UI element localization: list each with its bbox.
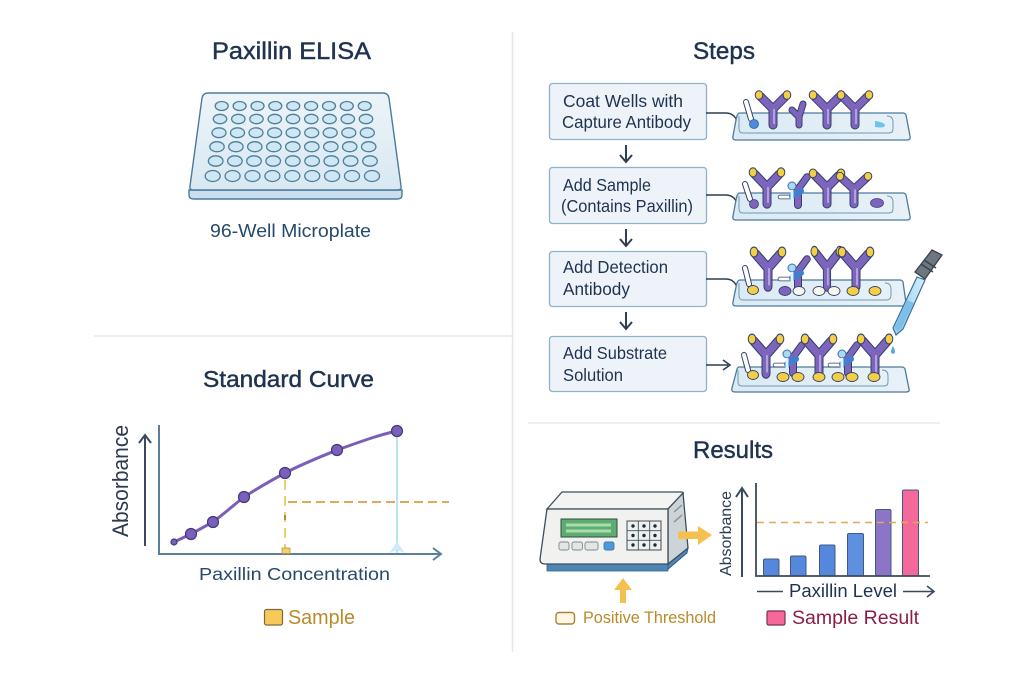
arrow: reader to chart: [678, 526, 712, 545]
panel: step 3 box: [550, 252, 706, 306]
y axis title: Absorbance: [718, 491, 735, 576]
illustration: step 4 substrate well: [706, 334, 909, 392]
bars: [764, 490, 918, 576]
sample dashed guide lines: [285, 480, 449, 548]
illustration: step 2 sample well: [706, 168, 910, 220]
data points: [171, 426, 402, 545]
screen: [561, 519, 617, 537]
icon: pipette: [891, 250, 942, 354]
y axis arrow: [736, 488, 748, 577]
icon: 96-well microplate: [189, 93, 402, 199]
legend: sample result: Sample Result: [792, 608, 920, 629]
x axis title: Paxillin Concentration: [199, 564, 390, 584]
panel: step 4 box: Solution: [563, 365, 623, 385]
panel: step 2 box: Add Sample: [563, 175, 651, 195]
panel: step 1 box: Capture Antibody: [562, 112, 691, 132]
icon: plate reader: [540, 492, 688, 571]
panel: step 4 box: Add Substrate: [563, 343, 667, 363]
curve: [174, 431, 397, 542]
label: 96-Well Microplate: 96-Well Microplate: [210, 221, 371, 241]
panel: step 4 box: [550, 336, 706, 392]
title: Steps: Steps: [693, 38, 755, 65]
arrow: step 3 to 4: [620, 312, 632, 329]
top standard guide line: [389, 431, 405, 553]
illustration: step 1 capture antibody well: [706, 91, 910, 140]
panel: step 1 box: [550, 84, 706, 140]
panel: step 3 box: Antibody: [563, 279, 630, 299]
axes: [159, 425, 441, 560]
title: Results: Results: [693, 437, 773, 464]
title: Paxillin ELISA: Paxillin ELISA: [212, 38, 371, 65]
legend: positive threshold: Positive Threshold: [583, 609, 716, 627]
threshold line: [757, 522, 928, 524]
chart: standard curve: [108, 425, 449, 584]
y axis label arrow: [139, 435, 151, 546]
arrow: step 1 to 2: [620, 145, 632, 162]
arrow: step 2 to 3: [620, 229, 632, 246]
keypad: [627, 521, 661, 550]
sample marker: [282, 548, 290, 554]
x axis title: Paxillin Level: [789, 581, 897, 601]
panel: step 2 box: (Contains Paxillin): [561, 196, 693, 216]
buttons: [559, 542, 614, 550]
y axis title: Absorbance: [108, 425, 133, 537]
title: Standard Curve: Standard Curve: [203, 366, 374, 392]
arrow: threshold to reader: [614, 578, 632, 603]
panel: step 3 box: Add Detection: [563, 257, 668, 277]
panel: step 2 box: [550, 168, 706, 224]
x axis title: [757, 581, 934, 601]
chart: results bars: [718, 483, 934, 601]
legend: sample: Sample: [288, 607, 355, 629]
axes: [756, 483, 930, 576]
illustration: step 3 detection antibody well: [706, 246, 906, 306]
panel: step 1 box: Coat Wells with: [563, 91, 683, 111]
